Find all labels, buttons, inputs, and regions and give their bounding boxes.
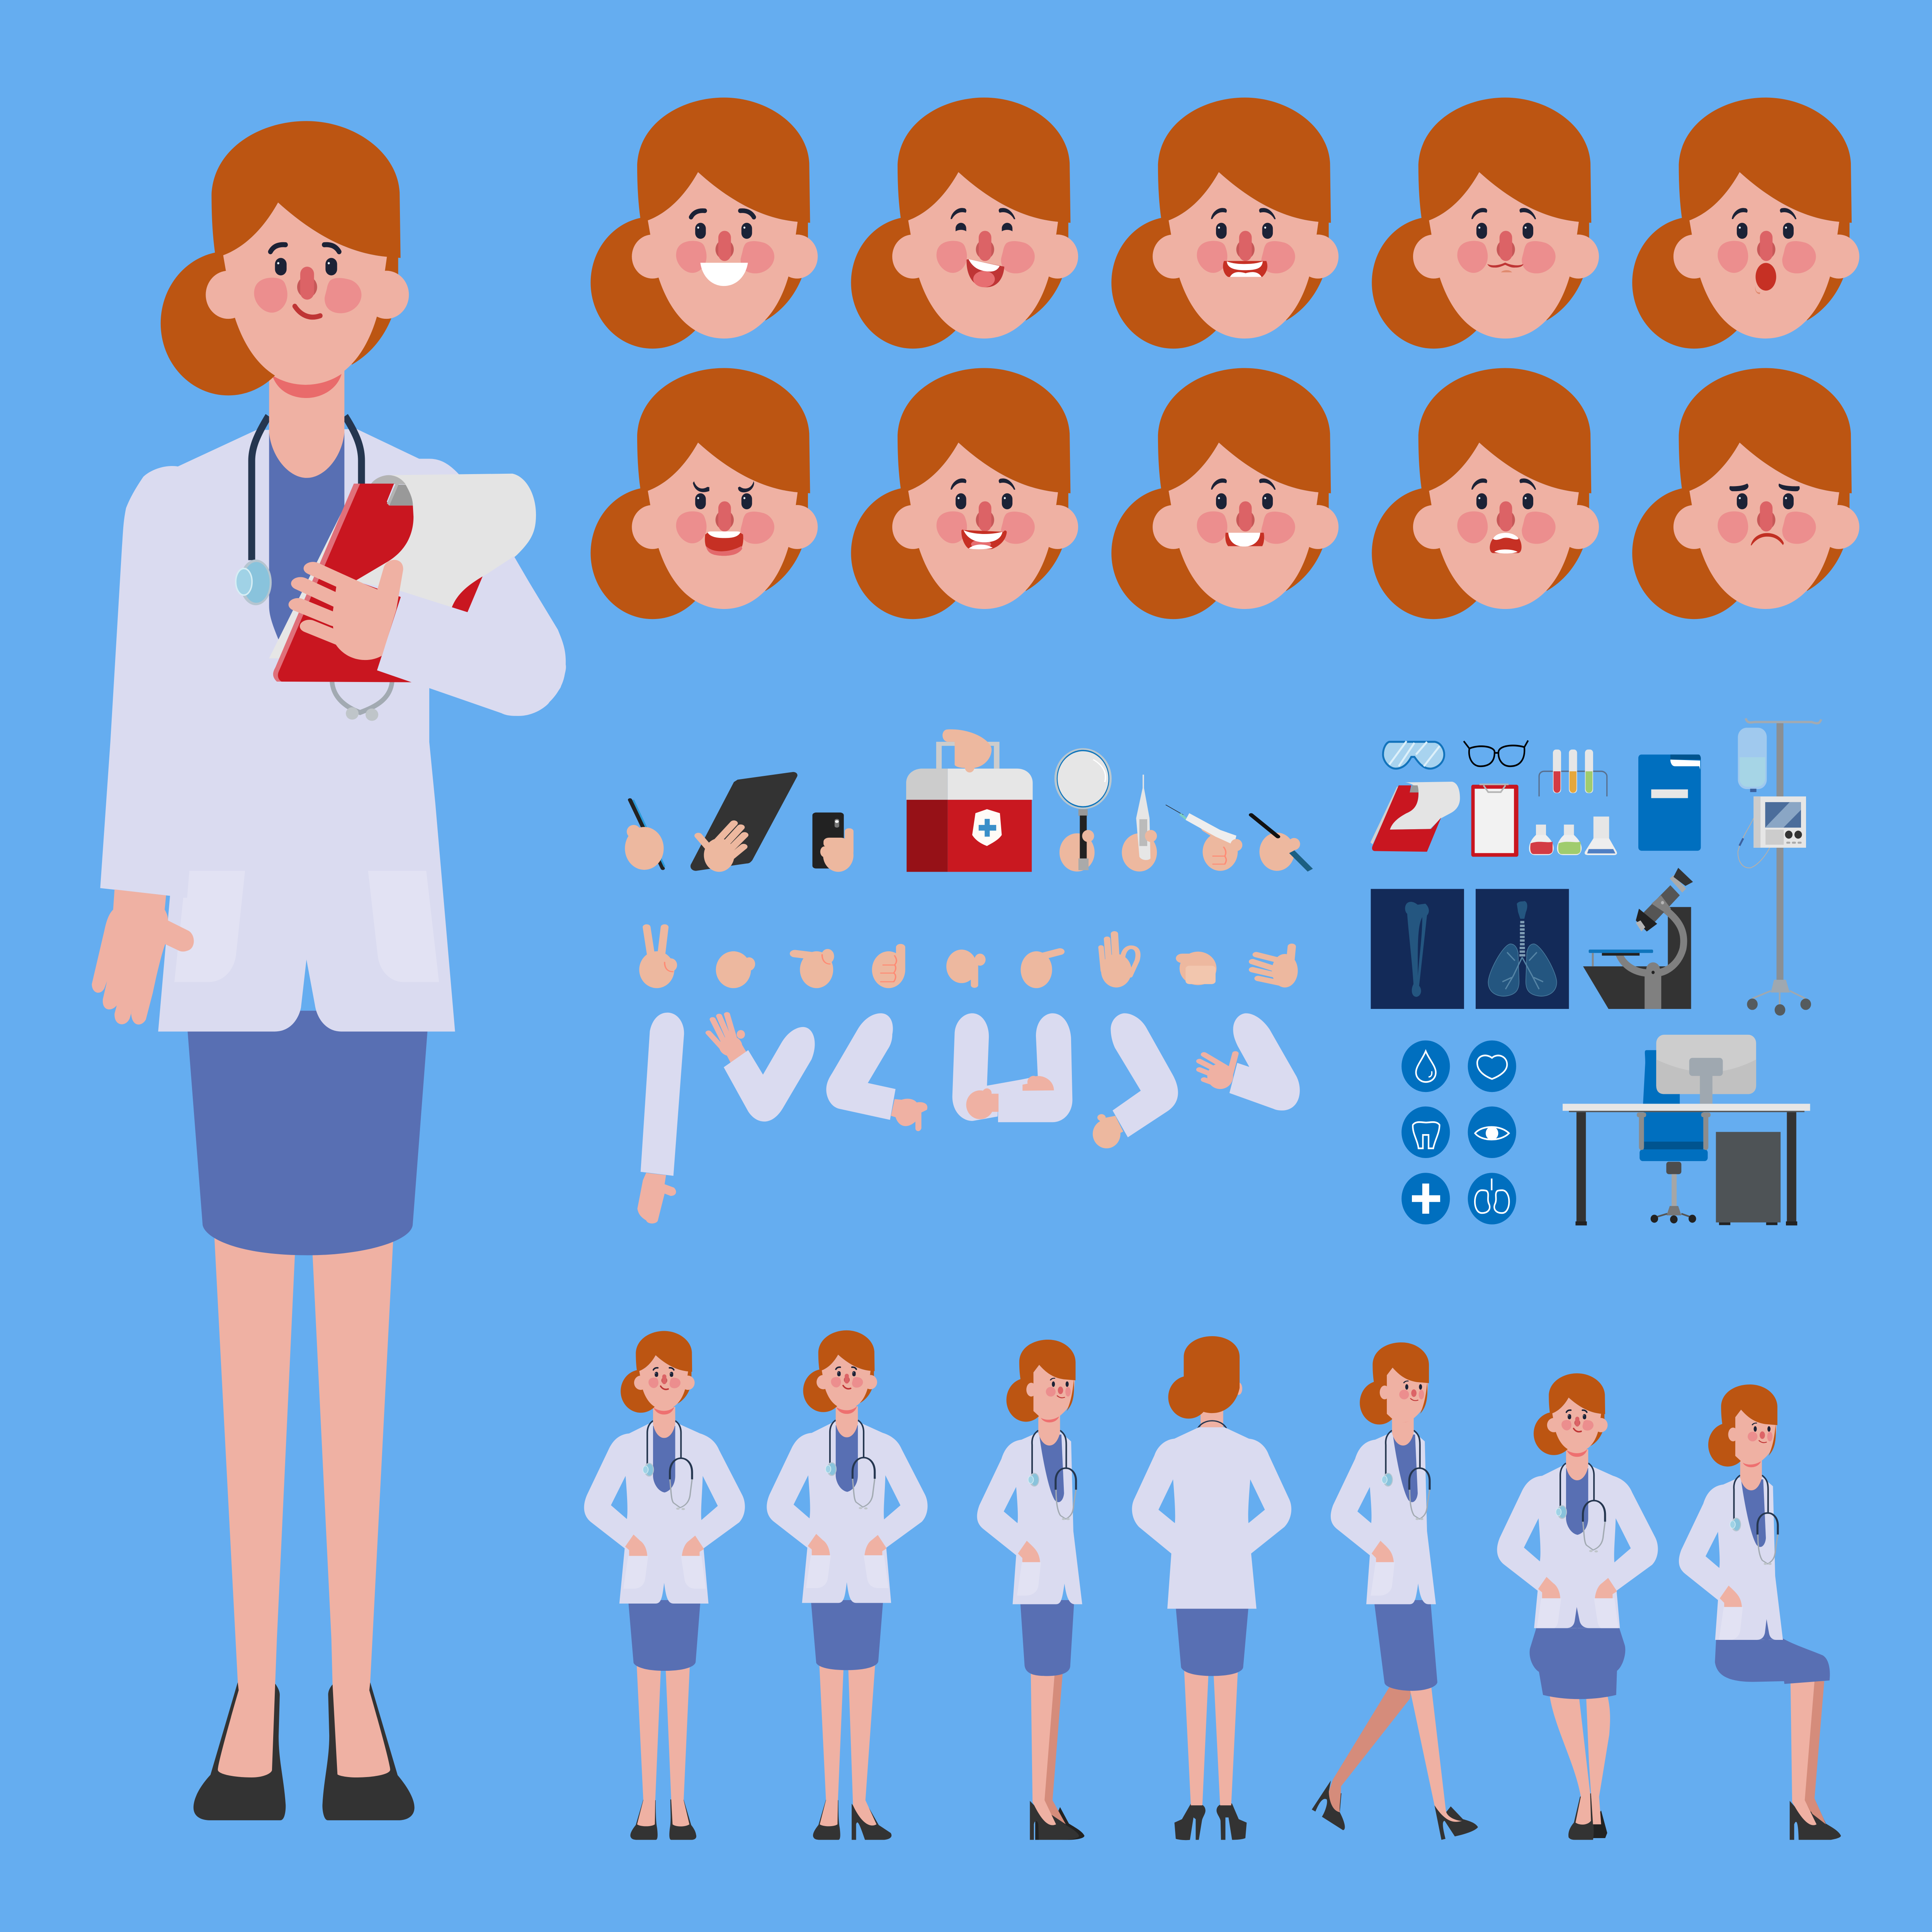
small figure 3: three quarter view (977, 1340, 1084, 1840)
skirt (186, 1011, 429, 1255)
desk (1563, 1104, 1810, 1225)
facial expressions grid (591, 97, 1859, 619)
hand with marker pen (1251, 815, 1310, 871)
desk with chair and monitor (1563, 1035, 1810, 1225)
head: big smile (591, 97, 818, 349)
icon: heart (1468, 1041, 1516, 1092)
head: shocked open mouth (1372, 368, 1599, 619)
head: angry shout (591, 368, 818, 619)
small figure 2: front with turned foot (767, 1330, 928, 1840)
icon: flasks (1529, 816, 1617, 855)
large doctor figure (92, 121, 566, 1820)
icon: kidneys (1468, 1173, 1516, 1225)
head: wink grin (851, 97, 1078, 349)
head: surprised o (1632, 97, 1859, 349)
hand with pen (625, 800, 665, 870)
x-ray: lungs (1476, 889, 1569, 1009)
lab coat (100, 429, 566, 1032)
gesture: palm under (1180, 952, 1216, 985)
gesture: thumbs up (872, 947, 905, 988)
gesture: ok sign (1101, 934, 1138, 988)
icon: eye (1468, 1106, 1516, 1158)
arm poses row (638, 1013, 1300, 1223)
specialty icons (1401, 1041, 1516, 1225)
hand gestures row (639, 927, 1298, 988)
chin shadow (272, 374, 342, 398)
head: wavy mouth (1372, 97, 1599, 349)
hand with thermometer (1122, 775, 1157, 871)
clipboard with paper (269, 474, 536, 682)
x-ray: bone (1371, 889, 1464, 1009)
hand with phone (812, 813, 854, 872)
arms: crossed at waist (952, 1013, 1072, 1122)
head: teeth smile (1111, 97, 1338, 349)
medical props (1371, 718, 1821, 1015)
stethoscope (236, 416, 392, 721)
legs (214, 1236, 393, 1777)
hand with magnifier (1054, 748, 1112, 871)
head with smile (161, 121, 409, 395)
small figure 7: seated side view (1679, 1384, 1841, 1840)
left hand (92, 889, 194, 1025)
gesture: pointing right (1021, 951, 1060, 988)
arm: hanging straight (638, 1013, 684, 1223)
icon: clipboard with white sheet (1471, 784, 1519, 857)
gesture: pointing left (795, 949, 834, 988)
head: wide laugh (851, 368, 1078, 619)
first aid kit with hand (906, 730, 1033, 872)
icon: test tubes in rack (1539, 750, 1607, 796)
hand with tablet (690, 772, 798, 872)
neck (269, 371, 344, 478)
small figure 6: crossed legs standing (1497, 1373, 1658, 1840)
pockets (174, 871, 439, 982)
gesture: peace sign (639, 927, 677, 988)
arm: bent forward (826, 1013, 927, 1131)
arm: reaching with open hand (1199, 1013, 1300, 1111)
gesture: pointing down (946, 950, 986, 985)
icon: glasses (1464, 740, 1528, 766)
icon: goggles (1383, 741, 1444, 769)
icon: plus (1401, 1173, 1450, 1225)
small figure 4: back view (1132, 1336, 1291, 1840)
right forearm sleeve (377, 556, 565, 716)
icon: red clipboard with curled paper (1371, 782, 1460, 852)
hands holding items row (625, 730, 1310, 872)
hand with syringe (1166, 805, 1242, 871)
shoes (194, 1682, 415, 1820)
icon: IV stand and monitor (1738, 718, 1821, 1015)
head: tooth grin (1111, 368, 1338, 619)
small figure 1: front (584, 1331, 745, 1840)
monitor (1656, 1035, 1756, 1104)
shirt (269, 433, 344, 639)
icon: blood drop (1401, 1041, 1450, 1092)
icon: tooth (1401, 1106, 1450, 1158)
arm: waving (709, 1014, 815, 1122)
drawer cabinet (1716, 1132, 1781, 1225)
gesture: fist (716, 951, 755, 988)
right hand on clipboard (298, 560, 403, 660)
gesture: open hand (1253, 947, 1298, 988)
head: sad frown (1632, 368, 1859, 619)
icon: blue folder (1638, 755, 1701, 851)
arm: bent down (1093, 1013, 1178, 1148)
icon: microscope (1583, 868, 1693, 1009)
small figure 5: walking (1312, 1342, 1478, 1840)
chair back (1637, 1050, 1711, 1223)
